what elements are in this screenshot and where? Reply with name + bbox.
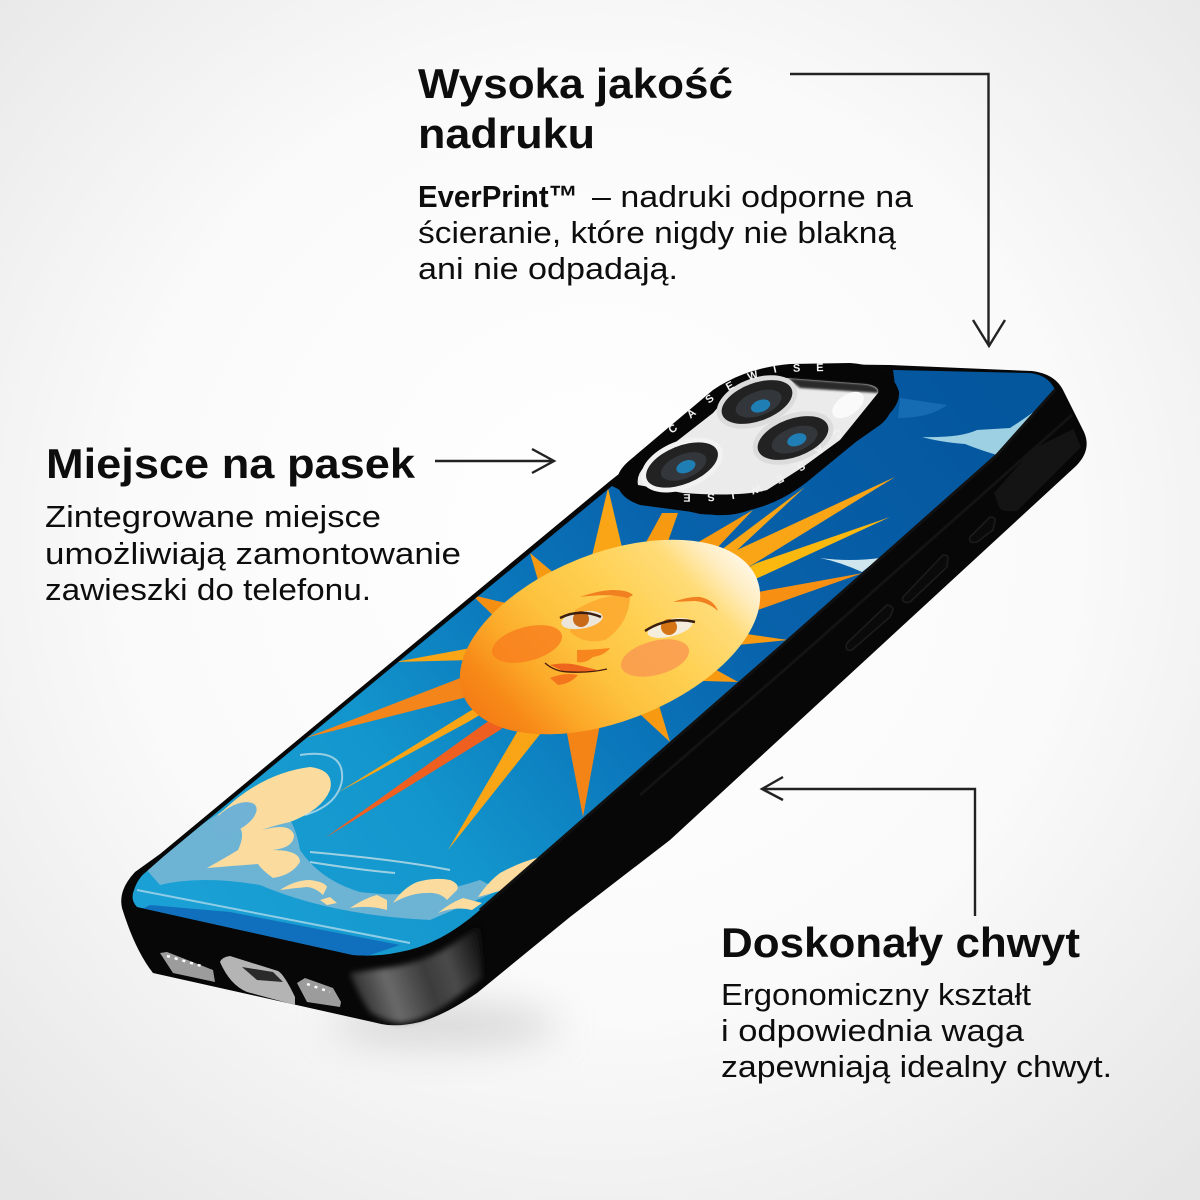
artwork screen [132, 370, 1055, 956]
volume button upper [903, 555, 948, 602]
arrow: grip [762, 777, 975, 916]
ray [398, 648, 468, 662]
lower lip [550, 674, 578, 685]
body text [45, 499, 461, 607]
body text: EverPrint™ [418, 179, 578, 214]
camera window [638, 378, 878, 494]
top right cloud [922, 412, 1034, 454]
cloud streak lines [310, 852, 450, 873]
eye shade [570, 596, 630, 641]
sea band [144, 905, 400, 956]
body text: Ergonomiczny kształt [721, 977, 1031, 1012]
volume button lower [846, 605, 893, 650]
right cheek [621, 639, 690, 677]
body text: – nadruki odporne na [592, 179, 914, 214]
left cheek [492, 625, 562, 663]
ray [567, 728, 600, 817]
body text: zapewniają idealny chwyt. [721, 1049, 1112, 1084]
ray [733, 477, 895, 566]
front rim line [480, 390, 1055, 910]
body text [721, 977, 1112, 1084]
charging port [220, 956, 295, 1005]
face disc [460, 540, 760, 734]
camera ring [617, 363, 899, 515]
body text: ani nie odpadają. [418, 251, 678, 286]
lid [645, 620, 695, 631]
ray [750, 517, 890, 578]
body text: i odpowiednia waga [721, 1013, 1025, 1048]
charging port and speakers [160, 952, 341, 1007]
arrow: print quality [790, 74, 1005, 346]
speaker holes [167, 956, 330, 992]
phone case with artwork [121, 363, 1087, 1027]
iris [573, 611, 589, 627]
eye white [646, 614, 694, 642]
ring lettering top: CASEWISE [668, 364, 824, 432]
side bevel [640, 415, 1072, 795]
cloud swirl [300, 754, 342, 815]
ray [448, 732, 540, 850]
bottom corner highlight [350, 925, 482, 1023]
ray [338, 710, 479, 793]
text block: Miejsce na pasek [45, 440, 461, 607]
strap slot [995, 430, 1080, 511]
lens 2 [745, 401, 841, 475]
ray [703, 670, 738, 682]
heading: Wysoka jakość [418, 60, 733, 107]
body text: Zintegrowane miejsce [45, 499, 381, 534]
text block: Wysoka jakość nadruku [418, 60, 914, 286]
case body [121, 364, 1087, 1025]
ray [592, 489, 622, 554]
body text [418, 179, 914, 286]
sky streak [898, 398, 947, 418]
ray [530, 553, 552, 580]
small cloud [820, 558, 880, 572]
body text: zawieszki do telefonu. [45, 572, 371, 607]
ray [758, 573, 862, 610]
sun rays [305, 477, 895, 850]
left eye [560, 608, 604, 632]
eye white [560, 608, 604, 632]
iris [661, 619, 677, 635]
ray [641, 707, 670, 742]
body text: umożliwiają zamontowanie [45, 536, 461, 571]
blue cloud haze [148, 810, 495, 920]
large cream cloud [207, 767, 331, 878]
lens 1 [709, 365, 805, 439]
lens 3 [633, 427, 731, 503]
arrow: strap slot [435, 449, 554, 473]
ray [740, 634, 786, 645]
upper lip [550, 664, 597, 673]
heading: Doskonały chwyt [721, 919, 1080, 966]
sun face [460, 540, 760, 734]
left brow [580, 590, 633, 598]
ray [723, 487, 805, 553]
right speaker [297, 978, 341, 1007]
heading [418, 60, 733, 157]
cloud inner swirl [219, 802, 257, 829]
left speaker [160, 952, 215, 982]
lid [560, 613, 601, 618]
port hole [242, 967, 283, 982]
sky [132, 370, 1055, 956]
right brow [673, 597, 718, 611]
ray [646, 513, 678, 542]
ray [698, 510, 753, 546]
ring lettering bottom: CASEWISE [684, 445, 822, 502]
camera module [618, 363, 900, 516]
ray [476, 596, 505, 614]
horizon line [137, 890, 410, 943]
ray [306, 678, 464, 738]
text block: Doskonały chwyt [721, 919, 1112, 1084]
flash [828, 386, 868, 424]
ray [325, 722, 503, 838]
mouth line [545, 663, 607, 672]
body text: ścieranie, które nigdy nie blakną [418, 215, 897, 250]
heading: Miejsce na pasek [46, 440, 416, 487]
mute switch [970, 517, 995, 542]
lower clouds [280, 857, 540, 913]
nose [577, 648, 610, 662]
right eye [645, 614, 695, 642]
phone shadow [330, 1005, 560, 1045]
heading: nadruku [418, 110, 595, 157]
side buttons [846, 430, 1080, 650]
window inner shadow [787, 378, 878, 393]
